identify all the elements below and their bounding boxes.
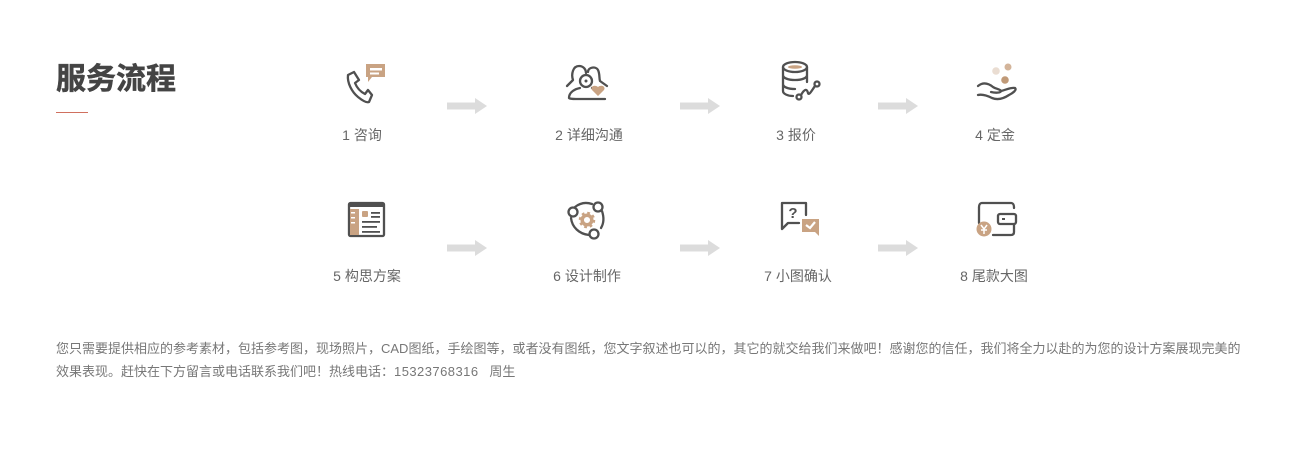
icon: question and check bubbles: ? bbox=[788, 205, 798, 222]
title underline bbox=[56, 112, 88, 113]
icon: phone with chat bubble bbox=[346, 64, 385, 104]
icon: hand with coins bbox=[976, 64, 1017, 100]
title: 服务流程 bbox=[56, 63, 176, 96]
icon: wallet with yen coin bbox=[976, 202, 1018, 236]
arrow: step 5 to 6 bbox=[447, 240, 487, 256]
icon: browser layout bbox=[348, 202, 386, 238]
arrow: step 7 to 8 bbox=[878, 240, 918, 256]
label: step 3: 3 报价 bbox=[776, 127, 816, 143]
icon: database with line chart bbox=[782, 60, 821, 101]
icon: question and check bubbles bbox=[780, 202, 819, 236]
label: step 2: 2 详细沟通 bbox=[555, 127, 623, 143]
label: step 8: 8 尾款大图 bbox=[960, 268, 1028, 284]
arrow: step 3 to 4 bbox=[878, 98, 918, 114]
arrow: step 2 to 3 bbox=[680, 98, 720, 114]
description text bbox=[56, 341, 1240, 379]
label: step 5: 5 构思方案 bbox=[333, 268, 401, 284]
icon: people with heart bbox=[566, 64, 608, 100]
label: step 6: 6 设计制作 bbox=[553, 268, 621, 284]
label: step 1: 1 咨询 bbox=[342, 127, 382, 143]
label: step 4: 4 定金 bbox=[975, 127, 1015, 143]
description text: 您只需要提供相应的参考素材，包括参考图，现场照片，CAD图纸，手绘图等，或者没有图纸，您文字叙述也可以的，其它的就交给我们来做吧！感谢您的信任，我们将全力以赴的为您的设计方案展现完美的 bbox=[56, 341, 1240, 356]
arrow: step 6 to 7 bbox=[680, 240, 720, 256]
icon: gear in cycle bbox=[567, 201, 605, 240]
description text: 效果表现。赶快在下方留言或电话联系我们吧！热线电话：15323768316 周生 bbox=[56, 364, 515, 379]
label: step 7: 7 小图确认 bbox=[764, 268, 832, 284]
arrow: step 1 to 2 bbox=[447, 98, 487, 114]
